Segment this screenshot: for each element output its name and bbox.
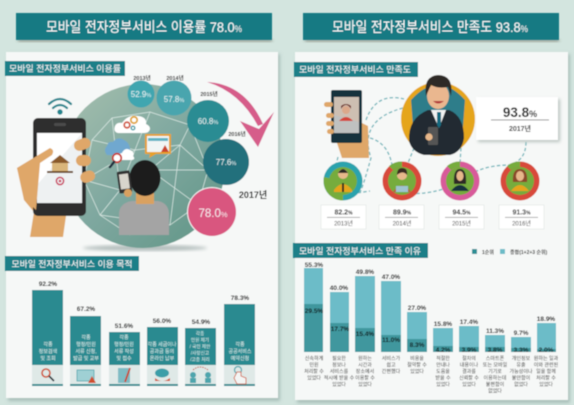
bar: civil complaints: /고충 처리 bbox=[190, 356, 210, 363]
bar: civil complaints: /사망신고 bbox=[191, 350, 209, 356]
bar: trust in results: 3.9% bbox=[462, 347, 477, 354]
data: 2017 bbox=[187, 187, 267, 237]
bar: easy and convenient: 47.0% bbox=[382, 274, 400, 281]
bar: civil documents filing: 행정/민원 bbox=[114, 341, 134, 348]
bar: no privacy worry: 개인정보 bbox=[512, 355, 531, 362]
data: satisfaction 2016 bbox=[499, 161, 544, 229]
arrow: trend bbox=[207, 82, 274, 147]
data: 2015: 2015년 bbox=[200, 90, 218, 98]
bar: information search bbox=[32, 281, 63, 386]
icon: man using phone bbox=[117, 160, 169, 235]
bar: related tasks together: 일을 함께 bbox=[536, 368, 556, 375]
bar: public service reservation: 78.3% bbox=[231, 295, 249, 302]
bar: related tasks together: 18.9% bbox=[537, 316, 555, 323]
bar: civil documents application: 각종 bbox=[81, 334, 91, 341]
bar chart: satisfaction reasons bbox=[304, 262, 559, 394]
title: satisfaction bbox=[303, 13, 559, 42]
bar: trust in results: 17.4% bbox=[460, 319, 478, 326]
bar: timely info: 서비스를 bbox=[330, 368, 349, 375]
bar: any time any place: 장소에서 bbox=[356, 368, 374, 375]
bar: guidance: 있었다 bbox=[436, 381, 450, 388]
bar: information search: 및 조회 bbox=[40, 355, 56, 362]
bar: no privacy worry: 유출 bbox=[516, 362, 526, 368]
bar: easy and convenient: 서비스가 bbox=[382, 355, 401, 362]
section label: usage rate bbox=[5, 61, 125, 76]
bar: guidance: 도움을 bbox=[436, 369, 450, 375]
panel: satisfaction bbox=[293, 52, 570, 403]
bar: timely info: 17.7% bbox=[331, 326, 349, 333]
bar: guidance: 안내나 bbox=[436, 362, 450, 368]
section label: usage purpose bbox=[5, 256, 139, 271]
data: satisfaction 2013 bbox=[321, 162, 366, 229]
bar: no inconvenience on mobile: 없었다 bbox=[488, 388, 502, 394]
bar: any time any place: 원하는 bbox=[358, 355, 372, 362]
data: satisfaction 2015 bbox=[439, 161, 484, 229]
bar: online payment: 공과금 등의 bbox=[150, 348, 174, 355]
icon: hand holding phone bbox=[324, 90, 369, 158]
bar: guidance: 4.2% bbox=[436, 347, 451, 354]
bar: civil documents filing bbox=[109, 323, 140, 386]
section label: satisfaction bbox=[294, 62, 418, 77]
data: satisfaction 2016: 91.3% bbox=[512, 210, 531, 216]
data: 2013: 52.9% bbox=[131, 90, 151, 99]
bar: trust in results: 결과를 bbox=[462, 368, 476, 375]
data: satisfaction 2013: 2013년 bbox=[334, 220, 353, 228]
bar: any time any place bbox=[355, 269, 375, 388]
data: 2014: 57.8% bbox=[164, 95, 184, 104]
icon: wifi bbox=[49, 99, 71, 114]
dashed connectors bbox=[336, 98, 526, 194]
bar: trust in results: 내용이나 bbox=[460, 362, 479, 368]
callout: 2017 satisfaction bbox=[476, 97, 560, 142]
bar: civil documents application: 발급 및 교부 bbox=[73, 355, 99, 362]
bar: guidance bbox=[433, 321, 453, 388]
bar: timely info bbox=[324, 285, 355, 388]
bar: no privacy worry: 없었다 bbox=[514, 381, 528, 388]
data: 2015: 60.8% bbox=[198, 117, 218, 126]
bar: civil complaints: 각종 bbox=[196, 330, 204, 337]
bar: timely info: 정보나 bbox=[332, 362, 346, 368]
bar: any time any place: 15.4% bbox=[356, 331, 374, 338]
bar: related tasks together: 원하는 일과 bbox=[534, 355, 559, 362]
bar: timely info: 40.0% bbox=[330, 285, 348, 292]
data: satisfaction 2013: 82.2% bbox=[334, 210, 353, 216]
bar: information search: 92.2% bbox=[39, 281, 57, 288]
callout: 2017 satisfaction: 2017년 bbox=[509, 124, 531, 133]
bar: cost saving: 비용을 bbox=[410, 355, 424, 362]
bar: related tasks together bbox=[534, 316, 559, 388]
data: satisfaction 2015: 2015년 bbox=[452, 220, 471, 228]
bar: civil documents filing: 각종 bbox=[119, 334, 129, 341]
bar: public service reservation bbox=[224, 295, 255, 386]
bar: civil documents filing: 51.6% bbox=[115, 323, 133, 330]
data: 2017: 78.0% bbox=[198, 208, 228, 220]
bar: fast processing: 29.5% bbox=[305, 308, 323, 315]
legend: 1순위 bbox=[482, 249, 494, 256]
data: 2016 bbox=[203, 130, 249, 185]
bar: cost saving: 8.3% bbox=[410, 342, 425, 349]
bar: guidance: 적절한 bbox=[436, 355, 450, 362]
bar: public service reservation: 공공서비스 bbox=[228, 348, 252, 355]
bar: no inconvenience on mobile: 불편함이 bbox=[486, 381, 504, 388]
bar: cost saving: 있었다 bbox=[410, 368, 424, 375]
bar: no privacy worry: 불안함이 bbox=[512, 374, 530, 382]
bar: easy and convenient: 11.0% bbox=[382, 337, 400, 344]
bar: related tasks together: 있었다 bbox=[539, 381, 553, 388]
data: 2016: 2016년 bbox=[228, 130, 246, 138]
bar: fast processing: 있었다 bbox=[307, 374, 321, 382]
bar: no inconvenience on mobile: 3.8% bbox=[488, 347, 503, 354]
bar: no inconvenience on mobile: 스마트폰 bbox=[486, 355, 505, 362]
bar: any time any place: 시간과 bbox=[358, 362, 372, 368]
bar: no inconvenience on mobile: 또는 모바일 bbox=[483, 362, 508, 368]
bar: trust in results bbox=[459, 319, 479, 388]
bar: any time any place: 있었다 bbox=[358, 381, 372, 388]
section label: usage rate: 모바일 전자정부서비스 이용률 bbox=[9, 64, 121, 74]
bar: fast processing bbox=[304, 262, 324, 382]
bar: timely info: 적시에 받을 수 bbox=[324, 374, 355, 382]
bar: no inconvenience on mobile bbox=[483, 328, 508, 394]
bar: no privacy worry bbox=[509, 330, 533, 388]
bar: related tasks together: 이와 관련된 bbox=[534, 362, 559, 368]
data: satisfaction 2014: 2014년 bbox=[393, 220, 411, 228]
bar: fast processing: 신속하게 bbox=[305, 355, 324, 362]
bar: fast processing: 처리할 수 bbox=[304, 368, 324, 375]
bar: trust in results: 있었다 bbox=[462, 381, 476, 388]
bar: civil documents application: 행정/민원 bbox=[76, 341, 96, 348]
bar: easy and convenient: 쉽고 bbox=[386, 362, 396, 368]
bar: public service reservation: 예약신청 bbox=[231, 355, 249, 362]
bar: fast processing: 민원 bbox=[309, 362, 319, 368]
panel: usage bbox=[5, 52, 280, 401]
bar: related tasks together: 2.0% bbox=[539, 347, 554, 354]
bar: civil complaints: 민원 제기 bbox=[191, 336, 209, 344]
bar: no inconvenience on mobile: 기기로 bbox=[488, 368, 502, 375]
bar: online payment: 56.0% bbox=[153, 318, 171, 325]
bar chart: usage purpose bbox=[32, 281, 255, 386]
icon: businessman in circle bbox=[401, 75, 475, 156]
bar: easy and convenient: 간편했다 bbox=[382, 368, 401, 375]
bar: no privacy worry: 가능성이나 bbox=[509, 368, 533, 375]
bar: civil documents application: 67.2% bbox=[77, 306, 95, 313]
section label: satisfaction reasons bbox=[293, 243, 428, 258]
title: usage rate bbox=[16, 13, 272, 42]
data: satisfaction 2016: 2016년 bbox=[512, 220, 531, 228]
icon: certificate card bbox=[145, 134, 171, 158]
illustration: globe with network bbox=[61, 84, 225, 251]
bar: cost saving bbox=[407, 305, 427, 375]
bar: online payment: 온라인 납부 bbox=[150, 355, 175, 362]
bar: civil documents application: 서류 신청, bbox=[75, 348, 97, 355]
bar: civil documents filing: 서류 작성 bbox=[114, 348, 134, 355]
data: 2017: 2017년 bbox=[239, 189, 267, 200]
bar: guidance: 받을 수 bbox=[435, 374, 451, 382]
bar: trust in results: 절차의 bbox=[462, 355, 476, 362]
data: 2013: 2013년 bbox=[133, 74, 151, 82]
bar: cost saving: 절약할 수 bbox=[407, 362, 427, 368]
bar: related tasks together: 처리할 수 bbox=[536, 374, 556, 382]
bar: trust in results: 신뢰할 수 bbox=[459, 374, 479, 382]
bar: timely info: 있었다 bbox=[332, 381, 346, 388]
bar: civil complaints: 54.9% bbox=[192, 319, 210, 326]
icon: cloud with gears bbox=[114, 116, 150, 133]
section label: satisfaction: 모바일 전자정부서비스 만족도 bbox=[299, 64, 411, 74]
data: satisfaction 2014: 89.9% bbox=[393, 210, 412, 216]
bar: cost saving: 27.0% bbox=[408, 305, 426, 312]
bar: civil complaints bbox=[185, 319, 216, 386]
bar: no privacy worry: 3.3% bbox=[514, 347, 529, 354]
bar: any time any place: 이용할 수 bbox=[355, 374, 375, 382]
data: 2016: 77.6% bbox=[216, 158, 236, 167]
bar: civil complaints: / 국민 제안 bbox=[190, 343, 211, 350]
data: 2013 bbox=[128, 74, 154, 108]
legend: 종합(1+2+3 순위) bbox=[510, 249, 548, 256]
bar: public service reservation: 각종 bbox=[235, 341, 245, 348]
bar: any time any place: 49.8% bbox=[356, 269, 374, 276]
bar: no inconvenience on mobile: 이용하는데 bbox=[483, 374, 507, 382]
data: satisfaction 2014 bbox=[379, 161, 424, 229]
data: satisfaction 2015: 94.5% bbox=[452, 210, 471, 216]
icon: cloud with magnifier bbox=[105, 138, 134, 167]
title: usage rate: 모바일 전자정부서비스 이용률 78.0% bbox=[46, 19, 242, 35]
bar: guidance: 15.8% bbox=[434, 321, 452, 328]
bar: civil documents filing: 및 접수 bbox=[116, 355, 132, 362]
data: 2015 bbox=[187, 90, 229, 142]
bar: online payment bbox=[147, 318, 178, 386]
legend bbox=[472, 249, 548, 256]
bar: no inconvenience on mobile: 11.3% bbox=[486, 328, 504, 335]
section label: usage purpose: 모바일 전자정부서비스 이용 목적 bbox=[12, 259, 132, 269]
data: 2014: 2014년 bbox=[166, 74, 184, 82]
bar: timely info: 필요한 bbox=[332, 355, 346, 362]
data: 2014 bbox=[156, 74, 192, 116]
section label: satisfaction reasons: 모바일 전자정부서비스 만족 이유 bbox=[299, 246, 421, 256]
callout: 2017 satisfaction: 93.8% bbox=[503, 105, 537, 120]
bar: information search: 각종 bbox=[43, 341, 53, 348]
bar: fast processing: 55.3% bbox=[305, 262, 323, 269]
bar: easy and convenient bbox=[381, 274, 401, 375]
title: satisfaction: 모바일 전자정부서비스 만족도 93.8% bbox=[332, 19, 528, 35]
bar: no privacy worry: 9.7% bbox=[514, 330, 529, 337]
bar: civil documents application bbox=[70, 306, 101, 386]
bar: online payment: 각종 세금이나 bbox=[148, 341, 177, 348]
bar: information search: 정보검색 bbox=[39, 348, 58, 355]
icon: hand holding phone bbox=[17, 118, 97, 237]
